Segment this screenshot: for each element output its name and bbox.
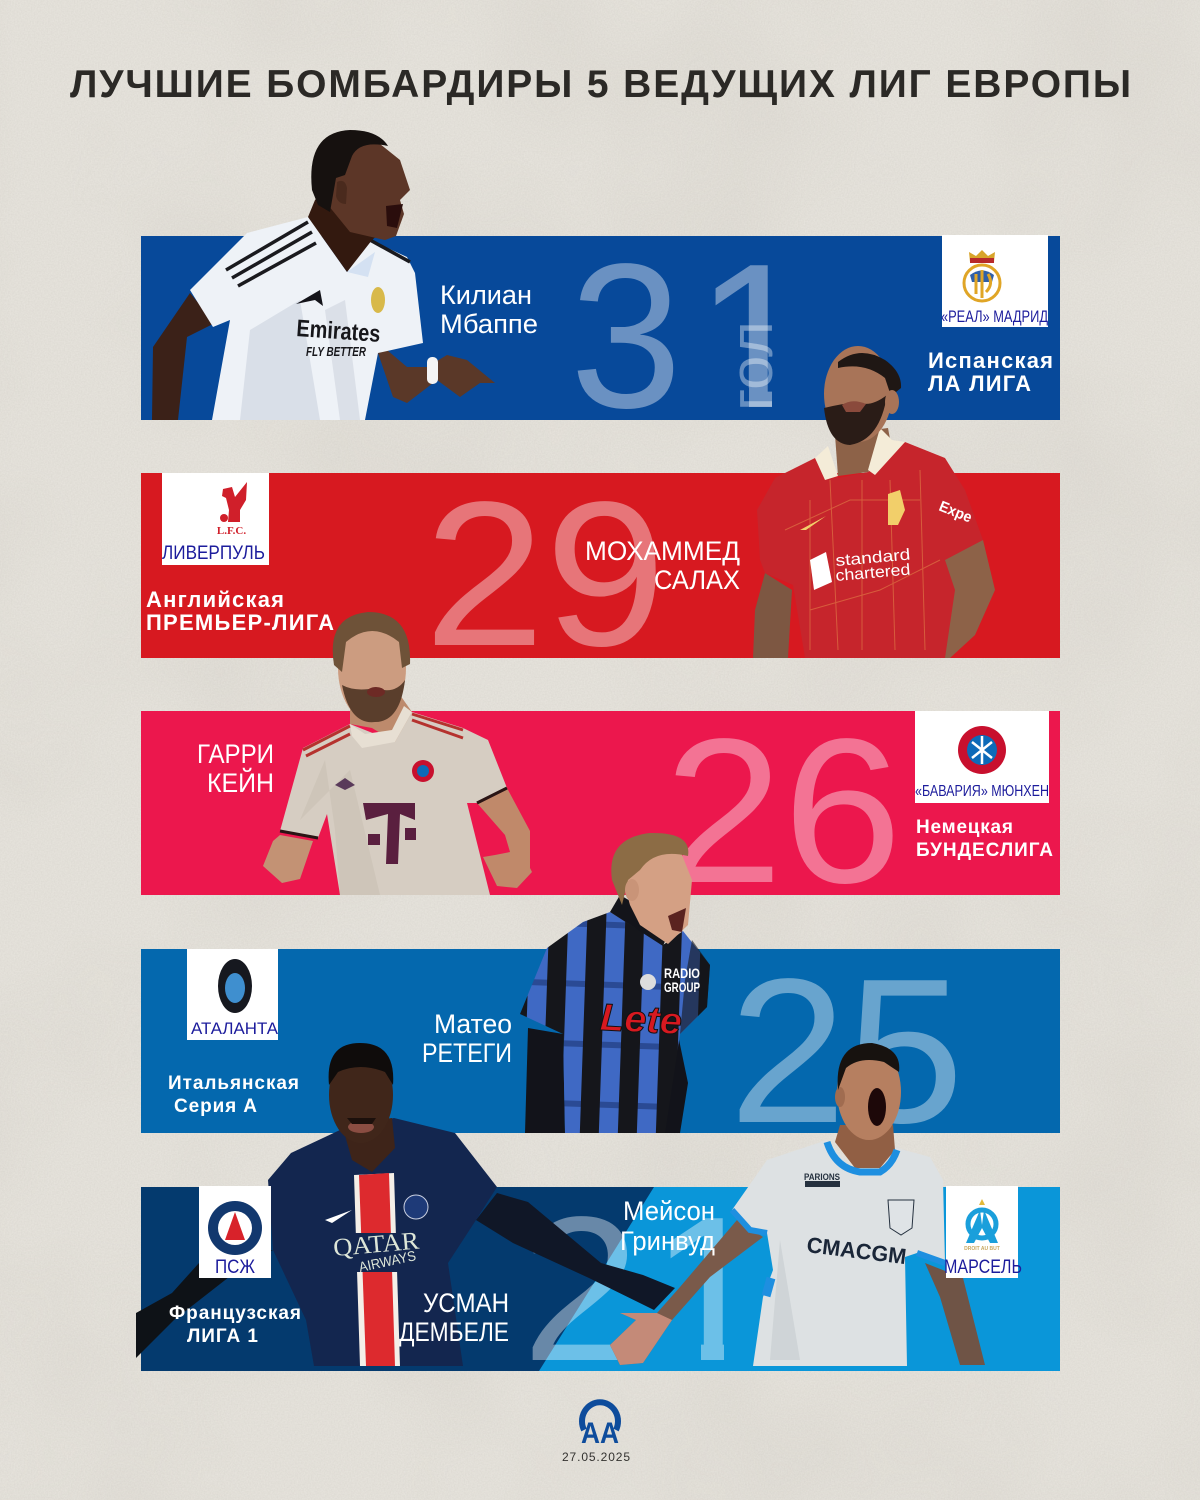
player name: Матео <box>434 1009 512 1039</box>
band <box>141 711 1060 895</box>
player name: МОХАММЕД <box>585 536 740 566</box>
logo: Anadolu Agency <box>581 1402 619 1450</box>
player: Retegui: RADIO <box>664 965 700 981</box>
player: Kane <box>263 612 532 895</box>
player: Mbappe: FLY BETTER <box>306 344 366 359</box>
player name: Greenwood <box>620 1196 715 1256</box>
player: Mbappe <box>152 130 495 420</box>
player name: Мбаппе <box>440 309 538 339</box>
club tile: Real Madrid: «РЕАЛ» МАДРИД <box>941 307 1048 326</box>
club tile: Real Madrid <box>941 235 1048 327</box>
player: Greenwood: CMACGM <box>805 1232 908 1269</box>
player name <box>440 280 538 339</box>
club tile: Liverpool: L.F.C. <box>217 525 246 537</box>
player: Dembele: AIRWAYS <box>357 1247 417 1275</box>
player name: КЕЙН <box>207 767 274 798</box>
player: Salah: chartered <box>835 562 911 585</box>
panel: Italy Serie A <box>141 833 1060 1166</box>
player: Dembele: QATAR <box>332 1228 421 1262</box>
goals number 21 <box>532 1216 724 1360</box>
band <box>141 236 1060 420</box>
league name: БУНДЕСЛИГА <box>916 840 1053 861</box>
player name: Килиан <box>440 280 532 310</box>
club tile: Marseille <box>944 1186 1022 1278</box>
player: Salah: Expe <box>937 498 974 526</box>
league name: ЛА ЛИГА <box>928 371 1031 396</box>
player name: Dembele <box>399 1288 509 1347</box>
player: Greenwood <box>610 1043 985 1366</box>
goals number 26: 26 <box>664 696 902 926</box>
club tile: Bayern Munich: «БАВАРИЯ» МЮНХЕН <box>915 783 1049 800</box>
player: Retegui <box>520 833 710 1133</box>
club tile: Marseille: DROIT AU BUT <box>964 1246 1000 1252</box>
club tile: PSG: ПСЖ <box>215 1257 255 1278</box>
club tile: Bayern Munich <box>915 711 1049 803</box>
player name: Dembele: ДЕМБЕЛЕ <box>399 1317 509 1347</box>
league name <box>928 348 1053 396</box>
date: 27.05.2025 <box>562 1450 630 1464</box>
goals number 21: 1 <box>650 1174 769 1404</box>
goals number 31: 1 <box>695 221 814 451</box>
player: Mbappe: Emirates <box>296 315 381 348</box>
player name: Greenwood: Гринвуд <box>620 1226 715 1256</box>
league name: Испанская <box>928 348 1053 373</box>
goals number 21: 2 <box>522 1174 640 1404</box>
band <box>141 473 1060 658</box>
club tile: PSG <box>199 1186 271 1278</box>
band: two-colour background <box>141 1187 1060 1371</box>
club tile: Liverpool: ЛИВЕРПУЛЬ <box>162 543 265 564</box>
panel: England Premier League <box>141 346 1060 689</box>
league name: Немецкая <box>916 817 1013 838</box>
player name: Greenwood: Мейсон <box>623 1196 715 1226</box>
club tile: Liverpool <box>162 473 269 565</box>
club tile: Atalanta <box>187 949 279 1040</box>
league name <box>146 587 334 635</box>
goals number 31 <box>578 263 772 409</box>
player name <box>197 739 274 798</box>
title: ЛУЧШИЕ БОМБАРДИРЫ 5 ВЕДУЩИХ ЛИГ ЕВРОПЫ <box>70 63 1131 106</box>
league name: Французская <box>169 1303 301 1324</box>
player name: РЕТЕГИ <box>422 1038 512 1068</box>
player name: Dembele: УСМАН <box>423 1288 509 1318</box>
player: Salah <box>753 346 995 658</box>
panel: Germany Bundesliga <box>141 612 1060 926</box>
league name <box>169 1303 301 1347</box>
goals unit: гол <box>718 321 785 411</box>
player: Greenwood: PARIONS <box>804 1172 840 1182</box>
player: Retegui: GROUP <box>664 979 700 995</box>
logo: Anadolu Agency: AA <box>581 1417 619 1450</box>
club tile: Marseille: МАРСЕЛЬ <box>944 1257 1022 1278</box>
goals number 29: 29 <box>424 459 666 689</box>
league name: ПРЕМЬЕР-ЛИГА <box>146 610 334 635</box>
player: Dembele <box>136 1043 675 1366</box>
goals number 25: 25 <box>729 936 964 1166</box>
league name <box>916 817 1053 861</box>
club tile: Atalanta: АТАЛАНТА <box>191 1019 279 1038</box>
player name <box>422 1009 512 1068</box>
panel: France Ligue 1 <box>136 1043 1060 1404</box>
player name <box>585 536 740 595</box>
league name: Английская <box>146 587 284 612</box>
player name: ГАРРИ <box>197 739 274 769</box>
league name: Итальянская <box>168 1073 299 1094</box>
player: Salah: standard <box>835 547 911 570</box>
goals number 31: 3 <box>570 221 682 451</box>
player: Retegui: Lete <box>599 997 683 1043</box>
player name: САЛАХ <box>654 565 740 595</box>
league name <box>168 1073 299 1117</box>
league name: ЛИГА 1 <box>187 1326 258 1347</box>
panel: Spain La Liga <box>141 130 1060 451</box>
band <box>141 949 1060 1133</box>
league name: Серия А <box>174 1096 257 1117</box>
